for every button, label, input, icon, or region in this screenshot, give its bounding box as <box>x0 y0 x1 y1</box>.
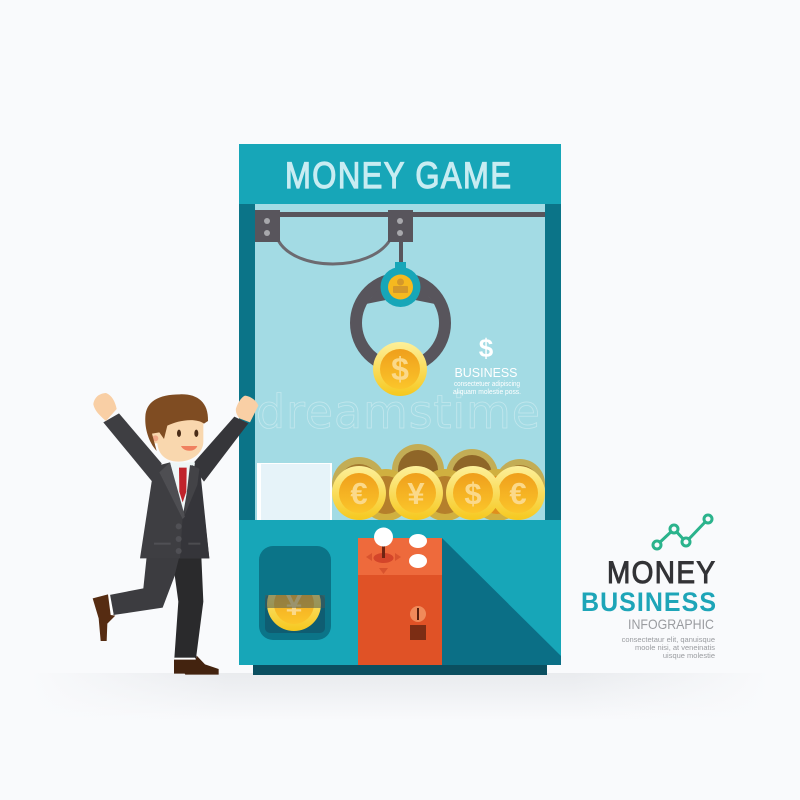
body copy: uisque molestie <box>663 651 715 660</box>
businessman character <box>93 393 258 675</box>
held dollar coin <box>373 342 427 396</box>
right euro coin: € <box>509 476 527 511</box>
dollar coin <box>446 466 500 520</box>
body copy <box>622 635 715 660</box>
coin pile <box>332 444 545 521</box>
icon: line chart <box>653 515 712 549</box>
right arm <box>192 417 248 482</box>
infographic canvas <box>92 144 716 696</box>
watermark: dreamstime <box>256 385 540 439</box>
shirt and collar <box>167 462 195 517</box>
head <box>145 394 208 462</box>
heading: business: BUSINESS <box>581 586 716 617</box>
bottom button <box>409 554 427 568</box>
control box <box>358 528 442 665</box>
claw arms <box>356 278 445 368</box>
yen coin: ¥ <box>407 476 425 511</box>
held dollar coin: $ <box>391 351 409 387</box>
euro coin: € <box>350 476 368 511</box>
right euro coin <box>491 466 545 520</box>
left pillar <box>239 204 255 520</box>
yen coin <box>389 466 443 520</box>
jacket <box>140 462 209 558</box>
left fist <box>93 393 117 421</box>
prize chute box <box>257 463 332 520</box>
glass window <box>255 204 545 520</box>
subheading: INFOGRAPHIC <box>628 616 714 632</box>
glass caption: $ <box>479 333 494 363</box>
glass caption: consectetuer adipiscing <box>454 381 520 388</box>
machine header panel <box>239 144 561 204</box>
floor shadow <box>30 673 770 721</box>
crane rail and cable <box>255 210 545 264</box>
coin return slot: ¥ <box>285 587 303 622</box>
diagonal shade panel <box>442 538 561 665</box>
branding block <box>581 515 716 660</box>
necktie <box>179 468 187 502</box>
machine base <box>253 660 547 675</box>
coin return slot <box>259 546 331 640</box>
heading: money: MONEY <box>607 556 715 590</box>
dollar coin: $ <box>464 476 482 511</box>
machine title: MONEY GAME <box>285 155 511 197</box>
coin slot <box>410 606 426 640</box>
top button <box>409 534 427 548</box>
right fist <box>236 396 258 422</box>
left arm <box>103 413 162 485</box>
joystick <box>366 528 401 574</box>
machine lower body <box>239 520 561 665</box>
glass caption: aliquam molestie poss. <box>453 389 521 396</box>
front leg and shoe <box>174 557 219 675</box>
back coins <box>332 444 545 521</box>
claw hub with person icon <box>380 262 420 307</box>
body copy: consectetaur elit, qanuisque <box>622 635 715 644</box>
euro coin <box>332 466 386 520</box>
claw machine <box>239 144 561 675</box>
right pillar <box>545 204 561 520</box>
rear leg and shoe <box>93 557 182 641</box>
glass caption: BUSINESS <box>454 365 518 380</box>
glass caption <box>453 333 521 396</box>
body copy: moole nisi, at veneinatis <box>635 643 715 652</box>
